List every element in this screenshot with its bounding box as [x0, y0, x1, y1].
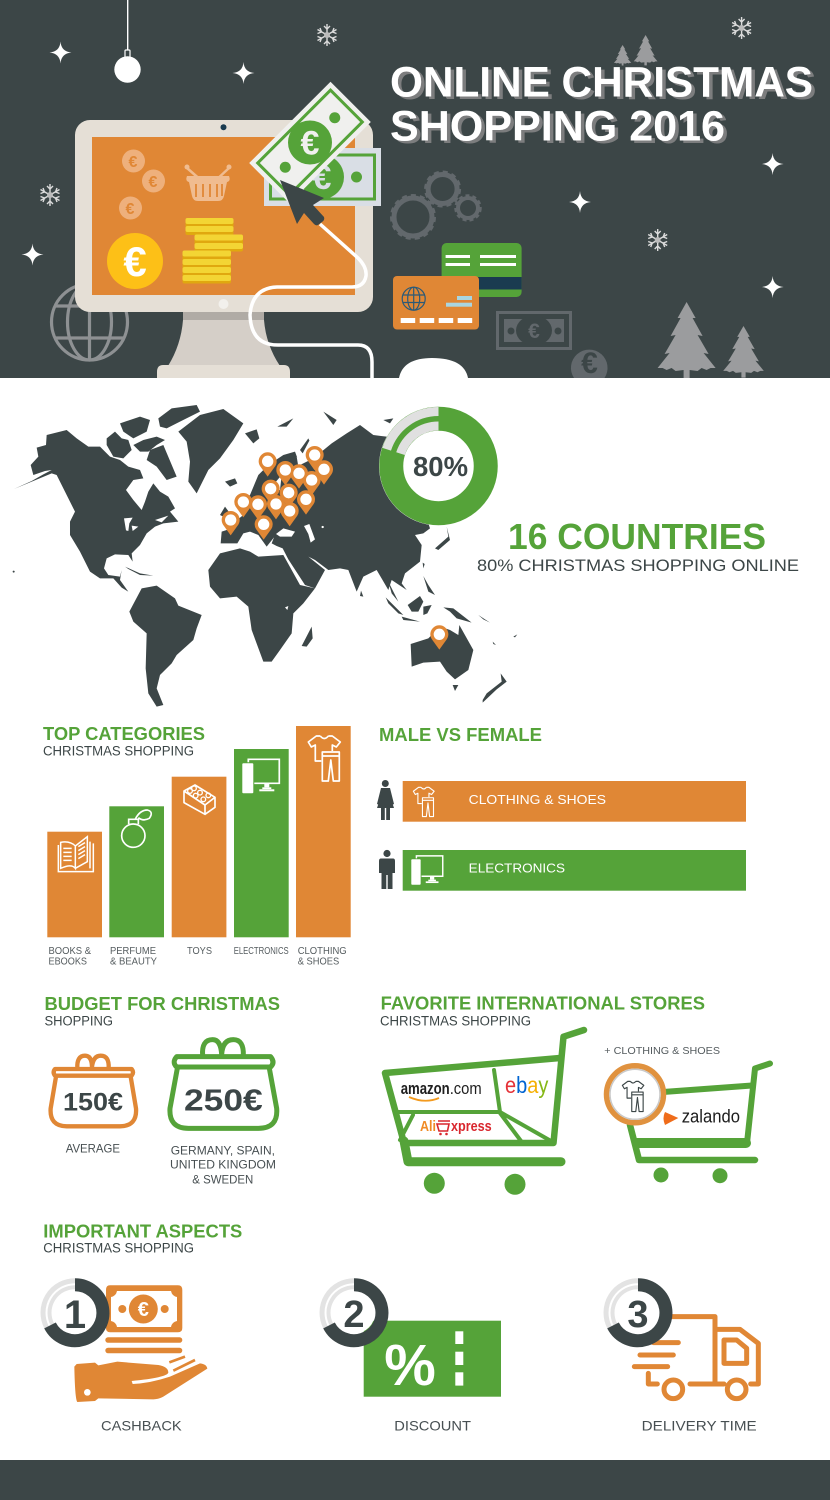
coin stacks [182, 218, 243, 284]
rank ring 1: 1 [64, 1293, 86, 1337]
banknote back: € [313, 159, 332, 197]
heading: favorite stores [380, 993, 705, 1029]
icon: purse countries [170, 1040, 277, 1128]
bar: electronics: ELECTRONICS [469, 861, 565, 876]
clothing label: + CLOTHING & SHOES [604, 1045, 720, 1057]
countries heading [477, 516, 799, 575]
icon: shopping basket [184, 164, 232, 201]
rank ring 1 [43, 1281, 103, 1341]
icon: clothes [308, 736, 340, 781]
bar: electronics [403, 850, 746, 891]
shopping cart: big [385, 1030, 584, 1195]
coupon: discount [364, 1321, 501, 1398]
bar chart: top categories [47, 726, 351, 937]
large trees [658, 302, 764, 378]
map: Oceania and East Asia islands [386, 527, 517, 703]
logo: zalando: zalando [682, 1106, 740, 1126]
dim banknote: € [528, 320, 540, 343]
coupon: discount: % [384, 1333, 436, 1398]
mouse cable [250, 224, 372, 378]
category labels: & SHOES [298, 957, 339, 968]
icon: purse average [51, 1056, 136, 1126]
heading: budget: SHOPPING [44, 1013, 113, 1028]
heading: budget: BUDGET FOR CHRISTMAS [44, 994, 280, 1014]
heading: top categories: TOP CATEGORIES [43, 724, 205, 744]
category labels: CLOTHING [298, 946, 347, 957]
icon: toy brick [184, 785, 215, 814]
coins on screen: € [149, 174, 158, 191]
cursor arrow [280, 180, 324, 225]
dim coin (clipped by header edge) [571, 347, 608, 380]
logo: amazon: amazon [401, 1079, 450, 1098]
title [390, 60, 813, 151]
logo: aliexpress [420, 1119, 492, 1135]
dim banknote [498, 312, 570, 348]
coins on screen: € [129, 154, 138, 171]
banknote front: € [301, 124, 320, 162]
icon: globe [52, 284, 128, 360]
heading: top categories: CHRISTMAS SHOPPING [43, 744, 194, 759]
icon: female [377, 780, 394, 820]
logo: aliexpress: Ali [420, 1119, 436, 1135]
sparkles [22, 42, 784, 298]
countries label: UNITED KINGDOM [170, 1158, 276, 1172]
average label: AVERAGE [66, 1142, 120, 1156]
icon: male [379, 850, 395, 889]
snowflakes [40, 17, 751, 251]
bar: clothing and shoes [403, 781, 746, 822]
aspect labels [101, 1418, 757, 1434]
category labels: PERFUME [110, 946, 156, 957]
coins on screen: € [123, 238, 147, 285]
icon: computer [242, 759, 279, 793]
rank ring 3 [606, 1281, 666, 1341]
logo: ebay: ebay [505, 1072, 549, 1098]
heading: favorite stores: FAVORITE INTERNATIONAL STORES [381, 993, 705, 1013]
map: the Americas and Greenland [13, 405, 243, 707]
heading: important aspects [43, 1221, 242, 1255]
rank ring 2 [322, 1281, 382, 1341]
dim coin (clipped by header edge): € [581, 347, 598, 380]
title: SHOPPING 2016 [390, 104, 725, 151]
donut chart: 80%: 80% [413, 451, 468, 482]
countries heading: 80% CHRISTMAS SHOPPING ONLINE [477, 556, 799, 575]
footer band [0, 1460, 830, 1500]
countries label: GERMANY, SPAIN, [171, 1143, 275, 1157]
heading: favorite stores: CHRISTMAS SHOPPING [380, 1014, 531, 1029]
hanging ornament [114, 0, 141, 83]
countries label: & SWEDEN [192, 1172, 253, 1186]
countries label [170, 1143, 276, 1186]
small trees behind title [614, 35, 657, 66]
icon: money in hand: € [138, 1299, 149, 1321]
category labels [48, 946, 347, 968]
logo: amazon: .com [450, 1079, 482, 1098]
coins on screen: € [126, 201, 135, 218]
aspect labels: CASHBACK [101, 1418, 182, 1434]
icon: purse average: 150€ [63, 1089, 123, 1117]
category labels: ELECTRONICS [234, 946, 289, 957]
map pins [222, 446, 448, 650]
heading: top categories [43, 724, 205, 759]
heading: important aspects: IMPORTANT ASPECTS [43, 1221, 242, 1241]
badge: clothes [606, 1066, 664, 1123]
category labels: BOOKS & [48, 946, 91, 957]
countries heading: 16 COUNTRIES [508, 516, 766, 557]
banknote front [249, 82, 371, 203]
header background [0, 0, 830, 378]
category labels: TOYS [187, 946, 212, 957]
banknote back [264, 148, 381, 206]
map: Africa, Europe and Asia [208, 412, 467, 662]
aspect labels: DELIVERY TIME [642, 1418, 757, 1434]
mouse [399, 358, 468, 378]
bar: clothing and shoes: CLOTHING & SHOES [469, 792, 606, 807]
rank ring 3: 3 [627, 1294, 649, 1336]
category labels: & BEAUTY [110, 957, 157, 968]
credit card: green [442, 243, 522, 297]
donut chart: 80% [379, 406, 498, 526]
heading: male vs female: MALE VS FEMALE [379, 725, 542, 745]
icon: book [58, 837, 93, 872]
logo: aliexpress: xpress [451, 1119, 492, 1135]
icon: gears [392, 172, 480, 238]
world map [13, 405, 517, 707]
title: ONLINE CHRISTMAS [390, 60, 813, 107]
icon: perfume [122, 810, 151, 847]
rank ring 2: 2 [343, 1294, 365, 1336]
icon: money in hand [74, 1285, 207, 1402]
aspect labels: DISCOUNT [394, 1418, 471, 1434]
shopping cart: small [606, 1064, 770, 1183]
icon: purse countries: 250€ [184, 1083, 263, 1118]
monitor [75, 120, 373, 378]
icon: delivery truck [634, 1317, 758, 1399]
coins on screen [107, 150, 165, 289]
category labels: EBOOKS [48, 957, 87, 968]
heading: important aspects: CHRISTMAS SHOPPING [43, 1240, 194, 1255]
credit card: orange [393, 276, 479, 330]
logo: amazon [401, 1079, 482, 1101]
heading: budget [44, 994, 280, 1028]
